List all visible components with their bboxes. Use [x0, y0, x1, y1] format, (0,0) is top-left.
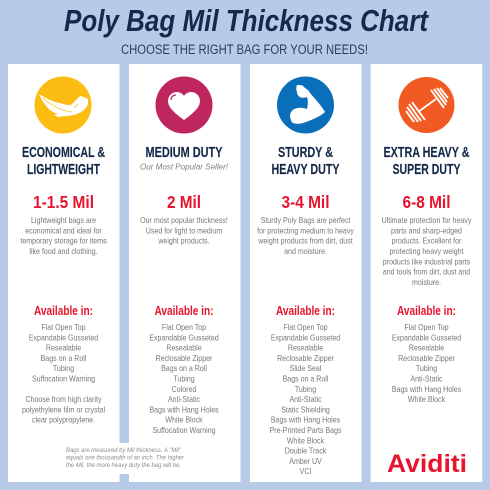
heading: MEDIUM DUTY: [146, 145, 223, 161]
available in heading: Available in:: [397, 303, 456, 318]
availability list: [269, 322, 342, 476]
mil rating: 1-1.5 Mil: [33, 192, 94, 212]
mil rating: 3-4 Mil: [282, 192, 330, 212]
availability list: Resealable: [166, 343, 202, 353]
description: parts and sharp-edged: [391, 226, 462, 235]
title: Poly Bag Mil Thickness Chart: [64, 3, 429, 38]
description: products. Excellent for: [392, 236, 462, 246]
availability list: Flat Open Top: [41, 322, 86, 332]
availability list: [149, 322, 219, 435]
description: weight products from dirt, dust: [257, 236, 353, 246]
availability list: Bags with Hang Holes: [392, 384, 461, 394]
description: Used for light to medium: [146, 226, 222, 235]
description: economical and ideal for: [25, 226, 102, 235]
availability list: Flat Open Top: [404, 322, 449, 332]
available in heading: Available in:: [34, 303, 93, 318]
availability list: Tubing: [53, 364, 74, 373]
description: and tools from dirt, dust and: [383, 267, 470, 277]
availability list: Expandable Gusseted: [271, 333, 340, 342]
description: [257, 215, 354, 256]
availability list: Reclosable Zipper: [398, 353, 455, 363]
availability list: Slide Seal: [290, 364, 322, 373]
footnote: the Mil, the more heavy duty the bag will be.: [66, 463, 181, 469]
available in heading: Available in:: [154, 303, 214, 318]
description: [20, 215, 107, 256]
description: protecting heavy weight: [389, 246, 464, 256]
description: Our most popular thickness!: [140, 215, 228, 225]
heading: [272, 145, 340, 178]
description: temporary storage for items: [20, 236, 107, 246]
material note: [22, 394, 105, 425]
availability list: Bags with Hang Holes: [271, 415, 340, 425]
availability list: Anti-Static: [410, 374, 443, 384]
heading: [384, 145, 470, 178]
availability list: White Block: [287, 436, 324, 445]
material note: Choose from high clarity: [25, 394, 102, 404]
panel: extra heavy and super duty: [371, 64, 482, 482]
heading: LIGHTWEIGHT: [27, 162, 100, 178]
description: weight products.: [157, 236, 210, 246]
heading: SUPER DUTY: [392, 162, 461, 178]
description: moisture.: [412, 277, 441, 287]
availability list: Tubing: [295, 384, 316, 394]
icon: heart: [156, 76, 212, 134]
panel: sturdy and heavy duty: [250, 64, 362, 482]
description: Sturdy Poly Bags are perfect: [261, 215, 351, 225]
heading: [22, 145, 105, 178]
footnote: Bags are measured by Mil thickness. A "Mil": [66, 448, 182, 454]
availability list: Reclosable Zipper: [277, 353, 334, 363]
logo: Aviditi: Aviditi: [387, 450, 467, 478]
availability list: Double Track: [285, 446, 326, 456]
availability list: Reclosable Zipper: [156, 353, 213, 363]
tagline: Our Most Popular Seller!: [140, 162, 229, 172]
availability list: Bags on a Roll: [161, 364, 207, 373]
subtitle: CHOOSE THE RIGHT BAG FOR YOUR NEEDS!: [121, 42, 368, 57]
description: Ultimate protection for heavy: [382, 215, 471, 225]
availability list: VCI: [300, 467, 311, 476]
panel: medium duty: [129, 64, 240, 482]
available in heading: Available in:: [276, 303, 335, 318]
availability list: Expandable Gusseted: [392, 333, 461, 342]
availability list: White Block: [408, 395, 445, 404]
availability list: Suffocation Warning: [32, 374, 95, 384]
availability list: Expandable Gusseted: [149, 333, 219, 342]
icon: feather: [34, 76, 92, 134]
availability list: Tubing: [173, 374, 195, 384]
availability list: Resealable: [46, 343, 81, 353]
mil rating: 6-8 Mil: [402, 192, 450, 212]
panel: economical and lightweight: [8, 64, 120, 482]
material note: clear polypropylene.: [32, 415, 95, 425]
footnote: equals one thousandth of an inch. The higher: [66, 456, 185, 462]
availability list: Resealable: [409, 343, 444, 353]
availability list: Anti-Static: [168, 395, 200, 404]
availability list: Bags with Hang Holes: [149, 405, 219, 415]
heading: STURDY &: [278, 145, 333, 161]
availability list: Pre-Printed Parts Bags: [269, 425, 342, 435]
description: for protecting medium to heavy: [257, 226, 354, 235]
availability list: [392, 322, 461, 404]
availability list: Static Shielding: [281, 405, 330, 415]
material note: polyethylene film or crystal: [22, 405, 105, 414]
description: [140, 215, 228, 246]
availability list: Expandable Gusseted: [29, 333, 98, 342]
icon: flexed arm: [277, 76, 334, 134]
heading: ECONOMICAL &: [22, 145, 105, 161]
availability list: Colored: [172, 384, 196, 394]
availability list: Tubing: [416, 364, 437, 373]
description: [382, 215, 471, 287]
availability list: Resealable: [288, 343, 323, 353]
availability list: Bags on a Roll: [41, 353, 87, 363]
availability list: Flat Open Top: [162, 322, 206, 332]
availability list: Anti-Static: [289, 395, 322, 404]
availability list: Bags on a Roll: [283, 374, 329, 384]
description: like food and clothing.: [29, 246, 98, 256]
description: and moisture.: [284, 246, 327, 256]
mil rating: 2 Mil: [167, 192, 201, 212]
footnote: [66, 443, 185, 474]
description: Lightweight bags are: [31, 215, 96, 225]
availability list: Suffocation Warning: [152, 425, 216, 435]
icon: dumbbell: [398, 77, 454, 133]
availability list: [29, 322, 98, 384]
heading: HEAVY DUTY: [272, 162, 340, 178]
availability list: Amber UV: [289, 456, 323, 466]
availability list: Flat Open Top: [283, 322, 328, 332]
availability list: White Block: [165, 415, 203, 425]
description: products like industrial parts: [383, 257, 470, 266]
